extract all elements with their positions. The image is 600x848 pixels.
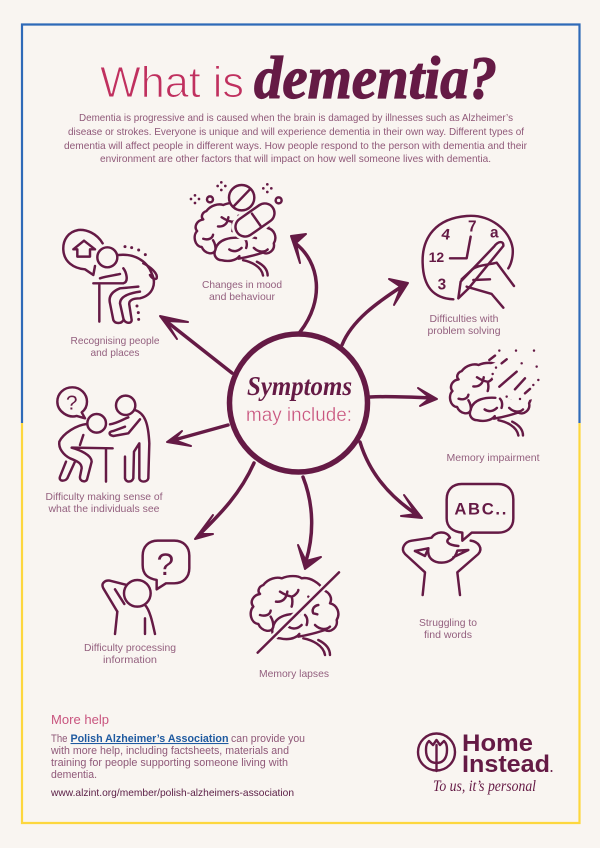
- arrow to memory lapses: [298, 477, 321, 569]
- help text: [50, 733, 305, 781]
- icon: numbers and hand with pencil: a: [490, 225, 499, 242]
- symptom: struggling to find words: [403, 484, 513, 641]
- label: [428, 314, 501, 337]
- title: [100, 45, 497, 111]
- label: find words: [424, 630, 472, 641]
- title: What is: [100, 58, 244, 107]
- label: information: [103, 655, 157, 666]
- intro paragraph: disease or strokes. Everyone is unique and will experience dementia in their own way. Different types of: [68, 127, 524, 138]
- arrow to making sense: [167, 425, 228, 446]
- label: Difficulties with: [430, 314, 499, 325]
- icon: two people with question bubble: ?: [66, 391, 77, 414]
- symptom: memory impairment: [446, 351, 540, 464]
- more help heading: More help: [51, 713, 109, 727]
- arrows radiating from centre: [160, 234, 437, 569]
- help text: can provide you: [231, 733, 305, 745]
- icon: numbers and hand with pencil: 7: [468, 219, 477, 236]
- more help block: [50, 713, 305, 799]
- logo mark: tulip in circle: [418, 734, 455, 771]
- symptom: difficulties with problem solving: [423, 216, 514, 337]
- intro paragraph: dementia will affect people in different ways. How people respond to the person with dementia and their: [64, 141, 528, 152]
- icon: numbers and hand with pencil: 12: [429, 249, 444, 265]
- label: problem solving: [428, 326, 501, 337]
- label: [70, 336, 160, 359]
- help text: with more help, including factsheets, materials and: [50, 745, 289, 757]
- arrow to mood: [291, 234, 316, 332]
- label: [419, 618, 477, 641]
- arrow to struggling: [360, 442, 422, 518]
- label: Difficulty processing: [84, 643, 176, 654]
- wordmark: Home: [462, 730, 533, 757]
- symptom: recognising people and places: [63, 230, 160, 359]
- symptom: memory lapses: [251, 572, 339, 680]
- icon: numbers and hand with pencil: [423, 216, 514, 308]
- intro paragraph: Dementia is progressive and is caused when the brain is damaged by illnesses such as Alzheimer’s: [79, 113, 513, 124]
- label: Difficulty making sense of: [46, 492, 163, 503]
- icon: person scratching head with question bubble: ?: [157, 547, 174, 582]
- label: Struggling to: [419, 618, 477, 629]
- arrow to memory impairment: [370, 388, 437, 406]
- may include: may include:: [246, 404, 352, 426]
- icon: stooped person with home bubble: [63, 230, 157, 323]
- icon: person holding head with ABC bubble: [403, 484, 513, 595]
- label: Recognising people: [70, 336, 160, 347]
- help text: training for people supporting someone living with: [51, 757, 288, 769]
- Home Instead logo: [418, 730, 552, 795]
- label: and behaviour: [209, 292, 276, 303]
- label: [84, 643, 176, 666]
- help text: Polish Alzheimer’s Association: [70, 733, 228, 745]
- help text: The: [51, 733, 68, 745]
- label: [46, 492, 163, 515]
- icon: crossed-out brain: [251, 572, 339, 655]
- label: Memory lapses: [259, 669, 329, 680]
- title: dementia?: [254, 45, 497, 111]
- arrow to processing: [195, 463, 254, 539]
- symptom: difficulty making sense of what the individuals see: [46, 387, 163, 515]
- tagline: To us, it’s personal: [433, 778, 536, 795]
- label: Changes in mood: [202, 280, 282, 291]
- label: and places: [90, 348, 140, 359]
- Symptoms heading: Symptoms: [247, 371, 352, 401]
- arrow to problem solving: [342, 279, 408, 345]
- label: [202, 280, 282, 303]
- Home Instead logo: Instead: [462, 751, 550, 778]
- symptom: changes in mood: [190, 181, 282, 303]
- help text: dementia.: [51, 769, 97, 781]
- symptom: difficulty processing information: [84, 541, 189, 666]
- website url: www.alzint.org/member/polish-alzheimers-association: [50, 787, 294, 799]
- label: what the individuals see: [47, 504, 160, 515]
- intro paragraph: environment are other factors that will impact on how well someone lives with dementia.: [100, 154, 491, 165]
- central circle: [230, 334, 368, 472]
- arrow to recognising: [160, 316, 232, 373]
- icon: numbers and hand with pencil: 3: [438, 276, 446, 293]
- icon: person holding head with ABC bubble: ABC..: [454, 500, 508, 519]
- icon: brain with dashes: [450, 351, 540, 436]
- intro paragraph: [64, 113, 528, 165]
- icon: numbers and hand with pencil: 4: [440, 226, 452, 244]
- icon: brain and pills: [190, 181, 282, 276]
- label: Memory impairment: [446, 453, 540, 464]
